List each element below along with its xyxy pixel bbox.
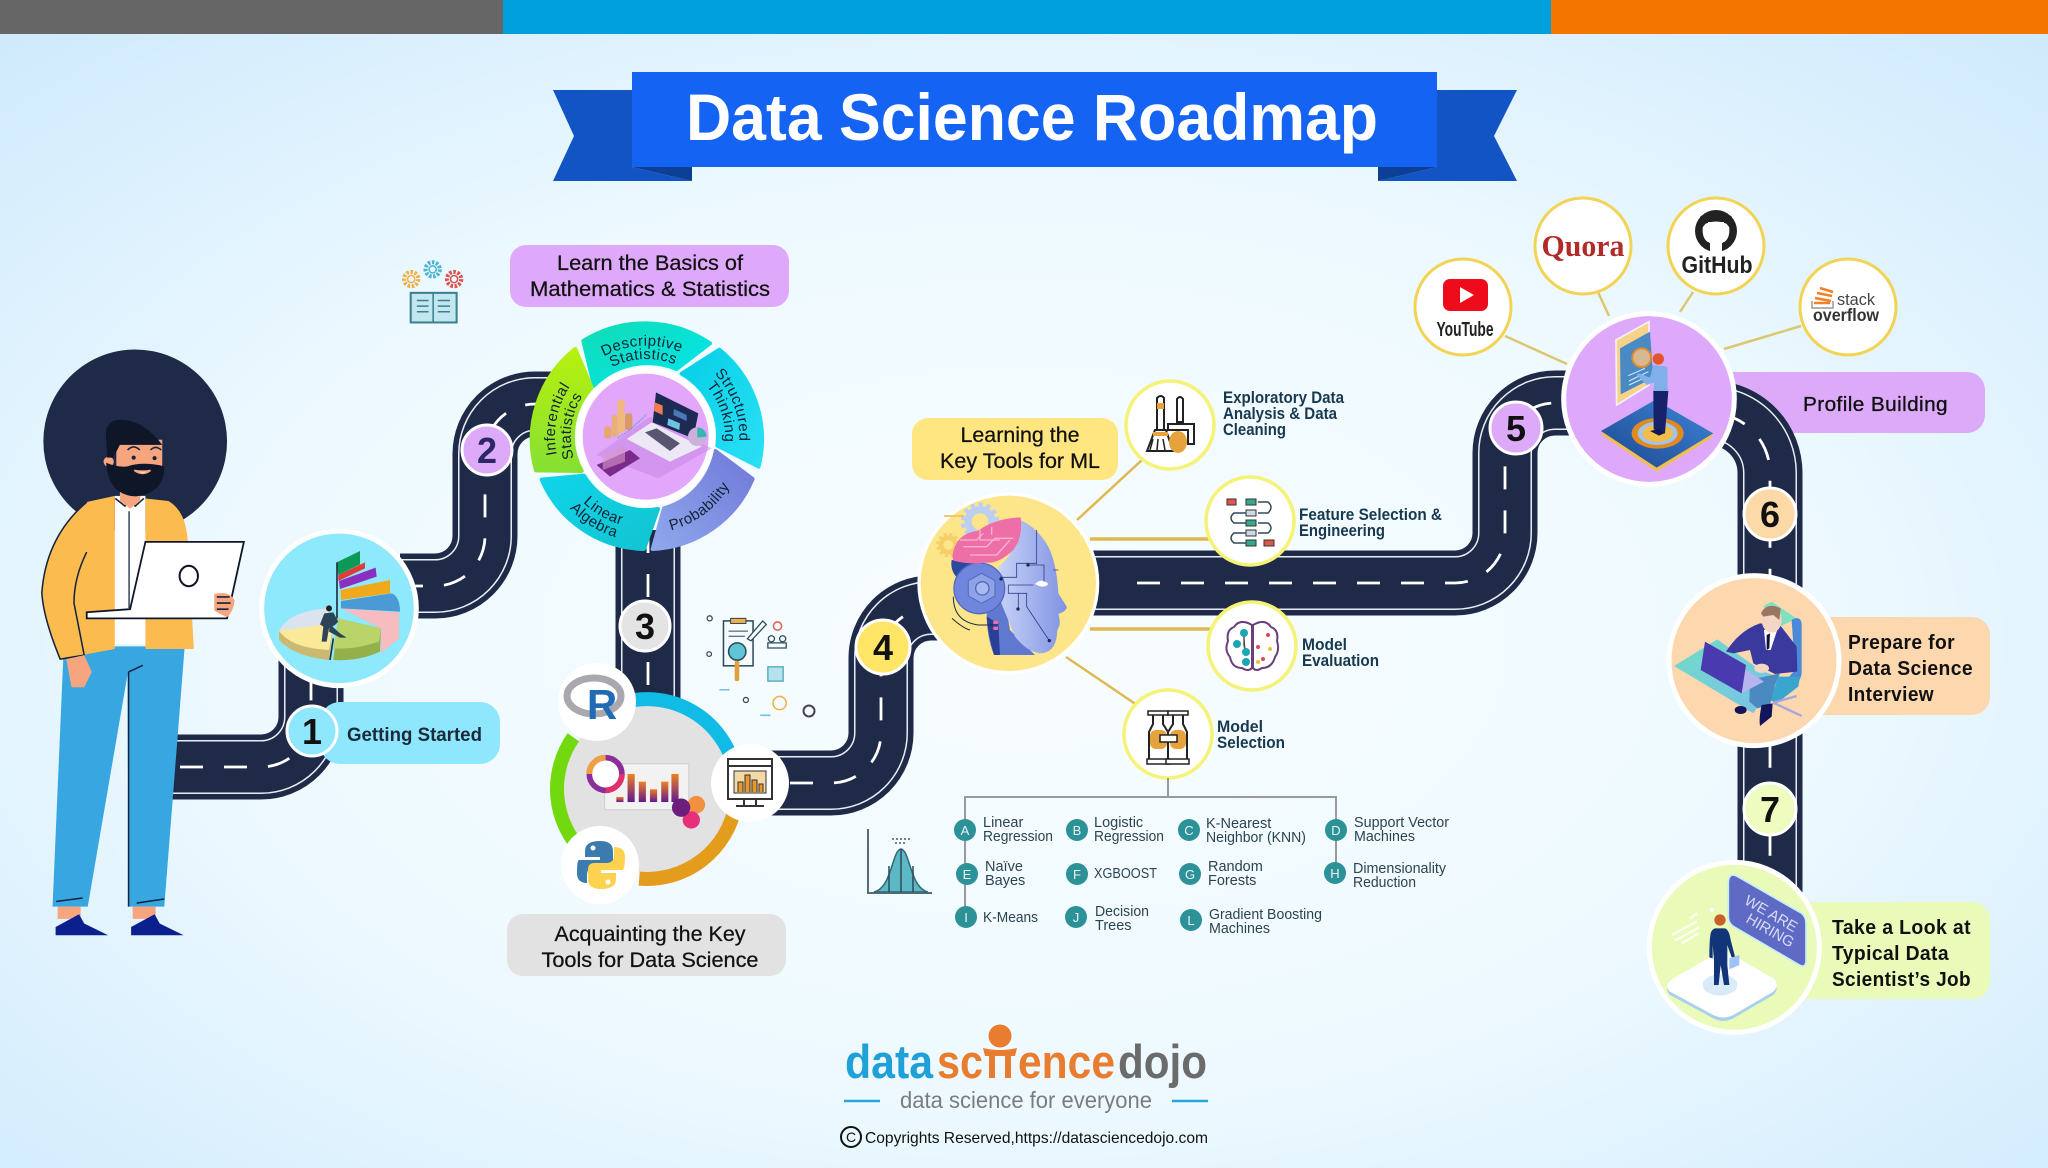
item A: Regression bbox=[983, 829, 1053, 845]
item H: Dimensionality bbox=[1353, 861, 1447, 877]
segment: structured thinking bbox=[680, 348, 764, 469]
logo: YouTube bbox=[1415, 259, 1511, 355]
top colour bar bbox=[0, 0, 2048, 34]
footer logo: dojo bbox=[1118, 1035, 1207, 1088]
tools circle: key tools for data science bbox=[557, 663, 789, 904]
step badge 2: 2 bbox=[477, 430, 497, 471]
step badge 3 bbox=[620, 601, 670, 651]
logo: GitHub bbox=[1668, 198, 1764, 294]
label pill: prepare for interview: Interview bbox=[1848, 683, 1934, 706]
hub: laptop with charts bbox=[579, 370, 712, 503]
label pill: getting started bbox=[320, 702, 500, 764]
icon: book and gears bbox=[404, 262, 461, 322]
icon: binoculars bbox=[1124, 690, 1212, 778]
item I bbox=[955, 906, 1038, 928]
logo: YouTube: YouTube bbox=[1436, 319, 1494, 341]
road segment 3 bbox=[616, 530, 680, 720]
item F: F bbox=[1073, 867, 1081, 882]
connector lines to profile logos bbox=[1505, 292, 1801, 364]
logo: GitHub: GitHub bbox=[1682, 252, 1752, 279]
label pill: learning key tools for ML: Key Tools for ML bbox=[940, 450, 1100, 473]
item E: Bayes bbox=[985, 873, 1025, 889]
icon: flow diagram bbox=[1206, 477, 1294, 565]
ML head illustration bbox=[919, 494, 1098, 673]
tree of ML algorithms bbox=[954, 778, 1449, 937]
item G: Random bbox=[1208, 859, 1263, 875]
logo: Stack Overflow: overflow bbox=[1813, 305, 1879, 325]
tool: model selection: Selection bbox=[1217, 734, 1285, 752]
copyright: Copyrights Reserved,https://datasciencedojo.com bbox=[865, 1130, 1208, 1147]
item A: Linear bbox=[983, 815, 1023, 831]
item L bbox=[1180, 907, 1322, 937]
segment: probability bbox=[650, 449, 755, 551]
label pill: typical job bbox=[1730, 902, 1990, 999]
profile building circle illustration bbox=[1564, 314, 1734, 484]
item C bbox=[1178, 816, 1306, 846]
icon: data analysis clipboard bbox=[707, 616, 786, 715]
step badge 3: 3 bbox=[635, 606, 655, 647]
hiring circle illustration bbox=[1649, 862, 1819, 1032]
label pill: learning key tools for ML bbox=[912, 418, 1118, 480]
item F bbox=[1066, 863, 1157, 885]
tool: model evaluation bbox=[1208, 602, 1379, 690]
small circle decoration bbox=[804, 706, 814, 716]
hiring circle illustration: HIRING bbox=[1743, 910, 1797, 951]
chart illustration bbox=[589, 758, 705, 829]
item J bbox=[1065, 904, 1149, 934]
label pill: basics of mathematics and statistics: Learn the Basics of bbox=[557, 252, 743, 275]
interview circle illustration bbox=[1669, 576, 1839, 746]
item G: Forests bbox=[1208, 873, 1256, 889]
person with laptop bbox=[42, 349, 244, 935]
footer logo bbox=[841, 1024, 1208, 1147]
road segment 1 bbox=[170, 640, 311, 767]
road bbox=[170, 403, 1770, 960]
item E: Naïve bbox=[985, 859, 1023, 875]
item E bbox=[956, 859, 1025, 889]
label pill: learning key tools for ML: Learning the bbox=[960, 424, 1080, 447]
item B: Logistic bbox=[1094, 815, 1143, 831]
item A bbox=[954, 815, 1053, 845]
icon: R logo bbox=[558, 663, 636, 741]
road segment 4 bbox=[740, 608, 960, 783]
icon: bell curve chart bbox=[868, 829, 932, 893]
icon: broom and dustpan bbox=[1126, 381, 1214, 469]
copyright: C bbox=[846, 1129, 856, 1145]
step badge 4: 4 bbox=[873, 627, 893, 668]
label pill: typical job: Typical Data bbox=[1832, 942, 1949, 965]
step badge 7 bbox=[1744, 783, 1796, 835]
step badge 1 bbox=[287, 706, 337, 756]
item H: Reduction bbox=[1353, 875, 1416, 891]
label pill: basics of mathematics and statistics: Mathematics & Statistics bbox=[530, 278, 770, 301]
step badge 7: 7 bbox=[1760, 789, 1780, 830]
segment: inferential statistics bbox=[530, 346, 594, 473]
label pill: profile building bbox=[1690, 372, 1985, 433]
logo: sun and torii bbox=[983, 1024, 1017, 1078]
item E: E bbox=[963, 867, 972, 882]
label pill: acquainting the key tools bbox=[507, 914, 786, 976]
tool: exploratory data analysis: Exploratory Data bbox=[1223, 389, 1345, 407]
tool: exploratory data analysis: Analysis & Data bbox=[1223, 405, 1338, 423]
item G bbox=[1179, 859, 1263, 889]
item J: Trees bbox=[1095, 918, 1132, 934]
item C: K-Nearest bbox=[1206, 816, 1271, 832]
segment: descriptive statistics bbox=[581, 321, 712, 388]
item I: K-Means bbox=[983, 910, 1038, 926]
item I: I bbox=[964, 910, 968, 925]
item D bbox=[1325, 815, 1449, 845]
step badge 6 bbox=[1744, 488, 1796, 540]
segment: structured thinking: Thinking bbox=[708, 380, 734, 441]
item B bbox=[1066, 815, 1164, 845]
tool: model selection: Model bbox=[1217, 718, 1263, 736]
item L: Machines bbox=[1209, 921, 1270, 937]
title banner bbox=[553, 72, 1517, 181]
tagline: data science for everyone bbox=[900, 1087, 1152, 1113]
item D: D bbox=[1331, 823, 1341, 838]
icon: brain bbox=[1208, 602, 1296, 690]
item H bbox=[1324, 861, 1447, 891]
logo: Stack Overflow: stack bbox=[1837, 290, 1875, 309]
label pill: prepare for interview: Prepare for bbox=[1848, 631, 1955, 654]
item L: Gradient Boosting bbox=[1209, 907, 1322, 923]
item J: Decision bbox=[1095, 904, 1149, 920]
connector lines from ML head bbox=[1066, 459, 1215, 705]
item B: Regression bbox=[1094, 829, 1164, 845]
item G: G bbox=[1185, 867, 1195, 882]
logo: Stack Overflow bbox=[1800, 259, 1896, 355]
label pill: typical job: Take a Look at bbox=[1832, 916, 1971, 939]
tool: model selection bbox=[1124, 690, 1285, 778]
item A: A bbox=[961, 823, 970, 838]
road segment 2 bbox=[400, 404, 570, 586]
item C: C bbox=[1184, 823, 1194, 838]
label pill: prepare for interview bbox=[1740, 617, 1990, 715]
logo: Quora: Quora bbox=[1542, 228, 1625, 263]
road segment 5 bbox=[1010, 403, 1620, 583]
step badge 4 bbox=[856, 620, 910, 674]
label pill: typical job: Scientist’s Job bbox=[1832, 968, 1971, 991]
segment: linear algebra: Algebra bbox=[570, 504, 616, 538]
segment: linear algebra: Linear bbox=[584, 496, 623, 524]
tool: exploratory data analysis: Cleaning bbox=[1223, 421, 1286, 439]
item D: Support Vector bbox=[1354, 815, 1449, 831]
segment: inferential statistics: Statistics bbox=[560, 394, 582, 459]
step badge 2 bbox=[462, 425, 512, 475]
tool: feature selection and engineering: Feature Selection & bbox=[1299, 506, 1442, 524]
tool: exploratory data analysis bbox=[1126, 381, 1345, 469]
label pill: profile building: Profile Building bbox=[1803, 393, 1948, 416]
item D: Machines bbox=[1354, 829, 1415, 845]
item H: H bbox=[1330, 866, 1340, 881]
item F: XGBOOST bbox=[1094, 866, 1157, 882]
title: Data Science Roadmap bbox=[686, 80, 1378, 154]
segment: descriptive statistics: Descriptive bbox=[600, 334, 682, 356]
tool: feature selection and engineering: Engineering bbox=[1299, 522, 1385, 540]
label pill: acquainting the key tools: Acquainting the Key bbox=[554, 923, 746, 946]
tool: feature selection and engineering bbox=[1206, 477, 1442, 565]
item L: L bbox=[1187, 913, 1195, 928]
label pill: getting started: Getting Started bbox=[347, 725, 482, 746]
step badge 6: 6 bbox=[1760, 494, 1780, 535]
icon: R logo: R bbox=[587, 681, 617, 728]
wheel: math and statistics topics bbox=[530, 321, 764, 551]
segment: inferential statistics: Inferential bbox=[544, 382, 570, 455]
icon: python logo bbox=[561, 826, 639, 904]
item B: B bbox=[1073, 823, 1081, 838]
tool: model evaluation: Evaluation bbox=[1302, 652, 1379, 670]
tool: model evaluation: Model bbox=[1302, 636, 1347, 654]
label pill: basics of mathematics and statistics bbox=[510, 245, 789, 307]
road segment 6 bbox=[1680, 413, 1770, 960]
logo: Quora bbox=[1535, 198, 1631, 294]
step badge 5 bbox=[1490, 402, 1542, 454]
footer logo: data bbox=[845, 1035, 934, 1088]
hiring circle illustration: WE ARE bbox=[1741, 892, 1800, 936]
step badge 5: 5 bbox=[1506, 408, 1526, 449]
segment: structured thinking: Structured bbox=[716, 368, 750, 440]
segment: linear algebra bbox=[540, 474, 660, 551]
label pill: prepare for interview: Data Science bbox=[1848, 657, 1973, 680]
item C: Neighbor (KNN) bbox=[1206, 830, 1306, 846]
segment: probability: Probability bbox=[669, 482, 730, 530]
step badge 1: 1 bbox=[302, 711, 322, 752]
label pill: acquainting the key tools: Tools for Data Science bbox=[542, 949, 758, 972]
step 1 circle: staircase pie bbox=[262, 531, 416, 686]
footer logo: sc bbox=[937, 1035, 983, 1088]
footer logo: ence bbox=[1018, 1035, 1115, 1088]
item J: J bbox=[1073, 910, 1079, 925]
segment: descriptive statistics: Statistics bbox=[610, 348, 676, 366]
icon: monitor chart bbox=[711, 744, 789, 822]
